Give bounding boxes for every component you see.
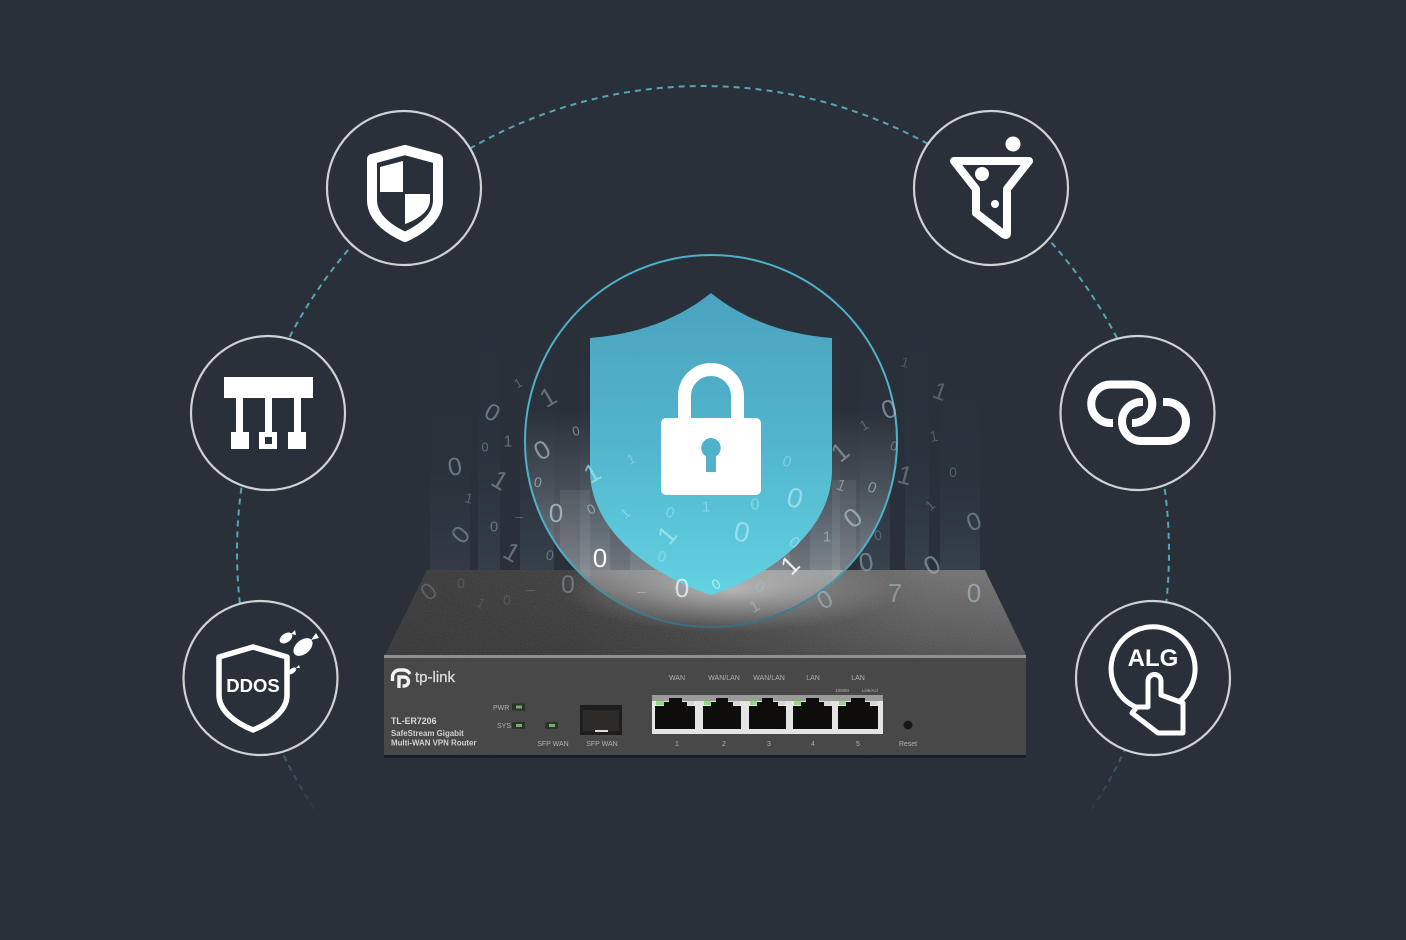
floating binary digits: 1 <box>702 498 710 516</box>
model text: TL-ER7206 <box>391 716 437 726</box>
floating binary digits: 1 <box>534 380 562 414</box>
floating binary digits: 7 <box>888 578 902 608</box>
floating binary digits: 0 <box>865 479 879 497</box>
floating binary digits: 0 <box>967 578 981 608</box>
floating binary digits: 1 <box>474 594 489 612</box>
port labels: LAN <box>851 675 865 682</box>
status LEDs: SYS <box>497 723 511 730</box>
floating binary digits: 1 <box>825 436 855 468</box>
floating binary digits: – <box>527 582 536 598</box>
feature: DDoS protection <box>184 601 338 755</box>
port labels: 1 <box>675 741 679 748</box>
floating binary digits: 0 <box>593 543 607 573</box>
floating binary digits: 0 <box>873 526 883 544</box>
port labels: 2 <box>722 741 726 748</box>
floating binary digits: 0 <box>949 464 957 480</box>
floating binary digits: 1 <box>747 597 763 617</box>
floating binary digits: 1 <box>823 528 831 546</box>
floating binary digits: 1 <box>504 434 513 450</box>
floating binary digits: 0 <box>663 504 677 522</box>
router front panel <box>384 655 1026 758</box>
floating binary digits: 0 <box>918 548 946 582</box>
floating binary digits: 1 <box>929 377 951 407</box>
port labels: WAN/LAN <box>753 675 785 682</box>
floating binary digits: 1 <box>651 520 683 550</box>
floating binary digits: 0 <box>753 578 767 596</box>
model text: SafeStream Gigabit <box>391 729 464 738</box>
floating binary digits: 0 <box>528 433 556 467</box>
floating binary digits: 0 <box>490 518 498 536</box>
floating binary digits: 0 <box>481 440 489 454</box>
floating binary digits: 0 <box>656 548 668 566</box>
floating binary digits: 1 <box>511 375 525 391</box>
floating binary digits: 0 <box>549 498 563 528</box>
sphere outline <box>525 255 897 627</box>
port labels: 4 <box>811 741 815 748</box>
floating binary digits: 0 <box>785 534 803 552</box>
floating binary digits: 0 <box>780 453 794 471</box>
floating binary digits: 0 <box>751 496 760 514</box>
floating binary digits: 0 <box>838 502 868 534</box>
status LEDs <box>493 704 558 730</box>
model text <box>391 716 476 748</box>
floating binary digits: 1 <box>857 416 872 434</box>
feature: firewall shield <box>327 111 481 265</box>
port labels: 5 <box>856 741 860 748</box>
port labels <box>537 675 917 748</box>
port labels: 1000M <box>835 688 849 693</box>
port labels: WAN <box>669 675 685 682</box>
floating binary digits: 0 <box>963 506 985 538</box>
floating binary digits: 0 <box>675 573 689 603</box>
SFP port <box>580 705 622 735</box>
port labels: Link/Act <box>862 688 879 693</box>
floating binary digits: 0 <box>446 452 464 482</box>
feature: DDoS protection: DDOS <box>226 675 280 696</box>
floating binary digits: 0 <box>503 592 511 608</box>
floating binary digits: 1 <box>578 456 606 490</box>
model text: Multi-WAN VPN Router <box>391 738 476 748</box>
floating binary digits <box>415 353 985 617</box>
central shield <box>590 293 832 595</box>
reset hole <box>904 720 912 730</box>
port labels: SFP WAN <box>586 741 618 748</box>
floating binary digits: 1 <box>834 476 848 496</box>
port labels: LAN <box>806 675 820 682</box>
missiles <box>278 630 319 676</box>
floating binary digits: 1 <box>486 463 514 497</box>
feature: ALG button <box>1076 601 1230 755</box>
floating binary digits: 0 <box>545 546 555 564</box>
floating binary digits: 0 <box>561 571 575 599</box>
feature: link chain <box>1060 336 1214 490</box>
infographic canvas <box>182 85 1232 808</box>
feature: network branching <box>191 336 345 490</box>
light rays <box>430 280 980 570</box>
floating binary digits: 0 <box>732 515 752 549</box>
ethernet ports <box>652 695 883 734</box>
padlock icon <box>661 370 761 495</box>
floating binary digits: 1 <box>922 496 938 514</box>
floating binary digits: 0 <box>889 438 899 454</box>
brand logo: tp-link <box>415 669 456 686</box>
port labels: WAN/LAN <box>708 675 740 682</box>
floating binary digits: 0 <box>584 500 599 518</box>
floating binary digits: 1 <box>498 535 526 569</box>
floating binary digits: – <box>515 508 523 524</box>
port labels: SFP WAN <box>537 741 569 748</box>
floating binary digits: 1 <box>899 353 911 371</box>
floating binary digits: 0 <box>783 481 807 515</box>
floating binary digits: 0 <box>812 584 838 616</box>
floating binary digits: 1 <box>463 489 475 507</box>
floating binary digits: 1 <box>617 504 633 522</box>
feature: ALG button: ALG <box>1128 645 1178 672</box>
floating binary digits: 0 <box>479 398 505 428</box>
floating binary digits: 1 <box>928 428 940 446</box>
floating binary digits: 1 <box>894 459 916 491</box>
floating binary digits: 0 <box>571 423 581 439</box>
port labels: Reset <box>899 741 917 748</box>
status LEDs: PWR <box>493 705 509 712</box>
floating binary digits: 0 <box>415 577 443 607</box>
floating binary digits: 1 <box>624 450 638 468</box>
floating binary digits: 0 <box>877 392 901 426</box>
floating binary digits: 0 <box>709 575 724 593</box>
floating binary digits: 0 <box>533 473 543 491</box>
floating binary digits: 1 <box>774 549 806 581</box>
floating binary digits: 0 <box>446 521 476 549</box>
floating binary digits: – <box>638 584 647 600</box>
feature: filter funnel <box>914 111 1068 265</box>
dashed connection arc <box>237 86 1169 818</box>
router top surface <box>385 570 1026 655</box>
port labels: 3 <box>767 741 771 748</box>
brand logo <box>392 669 456 688</box>
floating binary digits: 0 <box>856 546 876 578</box>
sphere light stripes <box>560 480 856 590</box>
central security sphere <box>525 255 897 627</box>
floating binary digits: 0 <box>457 575 465 591</box>
